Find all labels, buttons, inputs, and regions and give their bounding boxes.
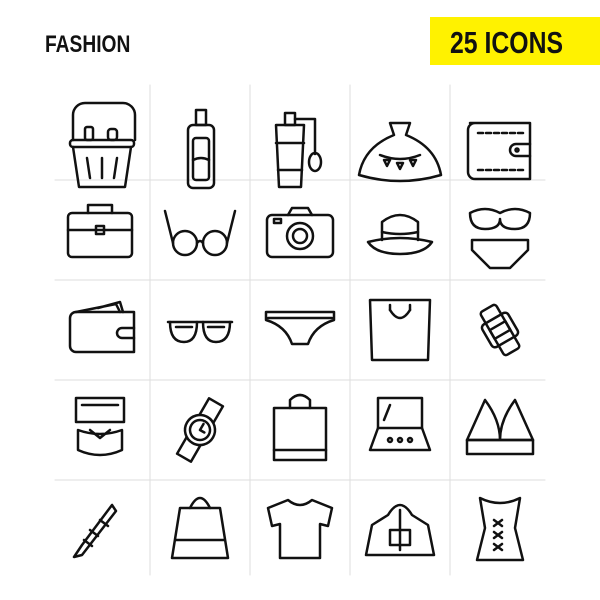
icon: laptop (370, 398, 430, 450)
icon: aviator glasses (168, 322, 232, 342)
badge: 25 icons: 25 ICONS (450, 25, 563, 60)
title: FASHION (45, 31, 130, 58)
icon: digital watch (475, 301, 525, 359)
icon: hoodie (366, 505, 434, 555)
icon: handbag (172, 498, 228, 558)
icon: basket (70, 103, 135, 187)
icon: wallet (468, 123, 530, 179)
icon: bottle (188, 110, 214, 188)
icon: underwear top (76, 398, 124, 455)
icon: wrist watch (171, 395, 229, 465)
icon: briefcase (68, 205, 132, 257)
icon: hat (368, 215, 432, 254)
icon: camera (267, 208, 333, 257)
icon: briefs (266, 312, 334, 344)
icon: necklace (359, 123, 441, 181)
icon: glasses (165, 211, 235, 255)
icon: corset (477, 498, 523, 560)
icon: shopping bag (370, 300, 430, 360)
icon: t-shirt (268, 500, 332, 558)
icon: wallet cards (70, 302, 134, 352)
icon: bikini (470, 209, 530, 268)
icon: tie (74, 505, 116, 557)
icon: bra (467, 400, 533, 454)
badge: 25 icons (430, 17, 600, 65)
icon: perfume (276, 113, 321, 187)
icon: shopping bag 2 (274, 395, 326, 460)
